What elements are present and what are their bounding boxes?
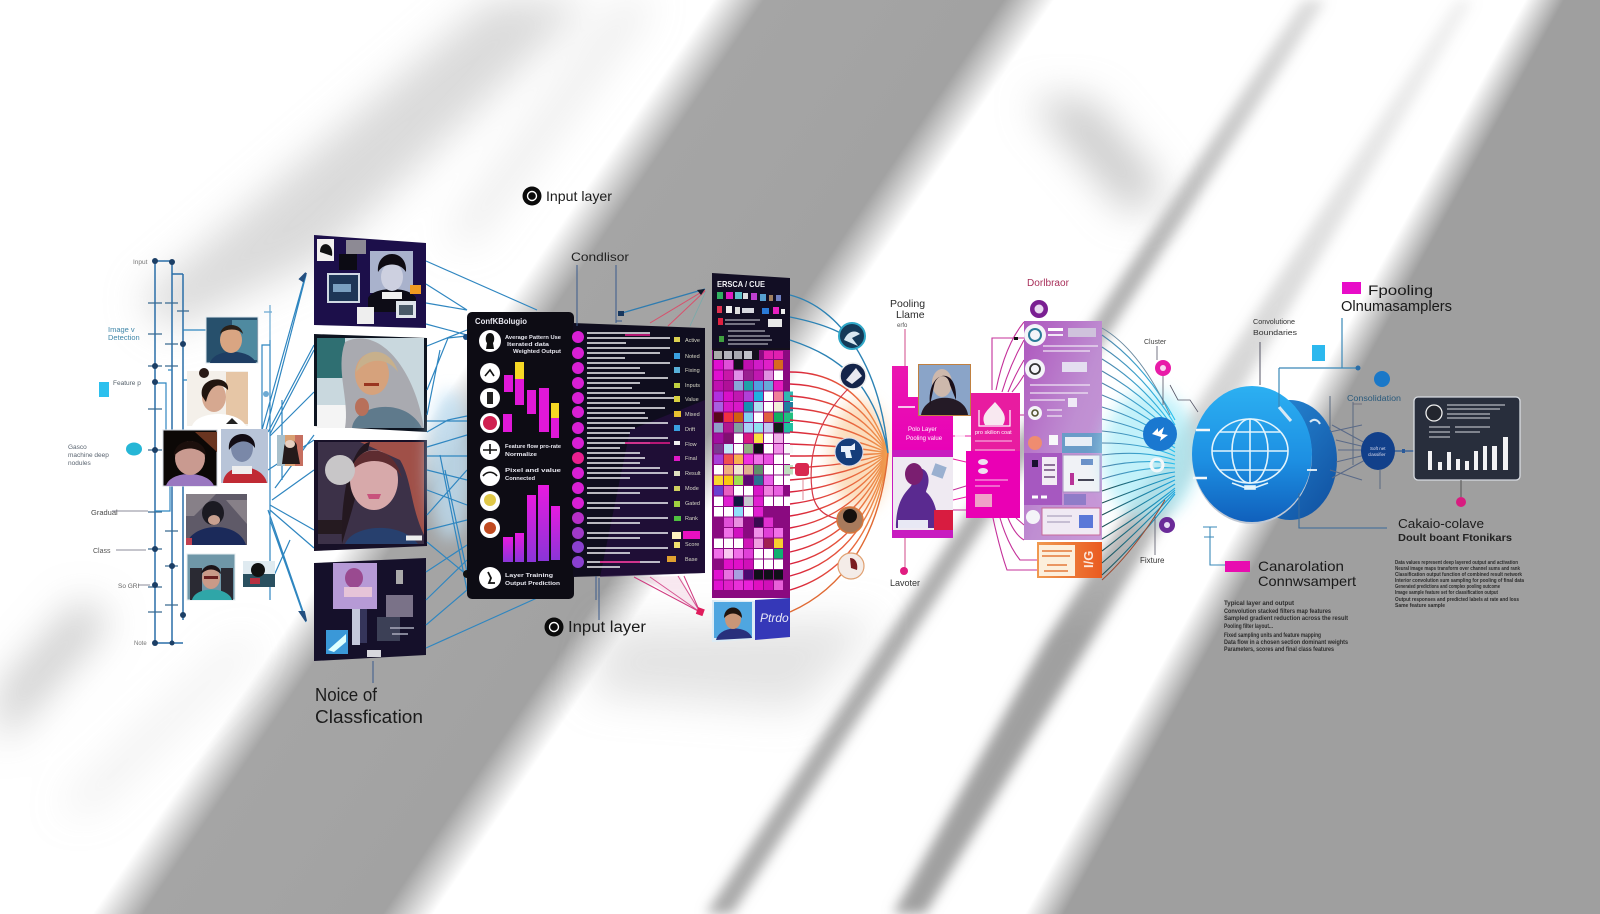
pooling bottom marker: Lavoter bbox=[890, 578, 920, 588]
label: pooling downsamplers heading bbox=[1341, 282, 1452, 315]
row end labels: Drift bbox=[685, 427, 696, 433]
text block: right description: Output responses and predicted labels at rate and loss bbox=[1395, 597, 1519, 603]
white ring node bbox=[1151, 459, 1163, 471]
label: cluster node bbox=[1144, 339, 1198, 412]
small photo: helmet rider bbox=[186, 494, 247, 545]
label: pooling layer: Llame bbox=[896, 309, 925, 321]
row end labels: Inputs bbox=[685, 383, 700, 389]
connector fan: small photos to large photo tiles bbox=[250, 273, 314, 622]
pooling panel caption: Polo Layer bbox=[908, 427, 937, 433]
large tile 2: blonde woman portrait bbox=[314, 334, 427, 432]
row end labels: Flow bbox=[685, 442, 697, 448]
large tile 3: auburn woman portrait bbox=[314, 440, 427, 551]
blue arrow node bbox=[1143, 417, 1177, 451]
pink panel: pooling stack bbox=[892, 364, 971, 538]
text block: right description: Data values represent deep layered output and activation bbox=[1395, 560, 1518, 566]
label: input layer top: Input layer bbox=[546, 188, 612, 204]
matrix text lines bbox=[725, 320, 772, 344]
row end labels: Mixed bbox=[685, 412, 700, 418]
text block: right description: Same feature sample bbox=[1395, 603, 1445, 609]
label: upper sphere caption: Boundaries bbox=[1253, 328, 1297, 337]
panel caption 1: Iterated data bbox=[507, 342, 550, 348]
text block: right description bbox=[1395, 560, 1525, 609]
panel caption 1: Weighted Output bbox=[513, 349, 561, 355]
label: classification caption: Noice of bbox=[315, 685, 378, 705]
text block: right description: Classification output function of combined result network bbox=[1395, 572, 1523, 578]
axis label: class tick: Class bbox=[93, 548, 111, 555]
large tile 4: purple collage bbox=[314, 558, 426, 661]
matrix thumbnail: portrait bbox=[712, 600, 755, 642]
small photo: side portrait bbox=[277, 435, 303, 466]
small photo: man teal shirt bbox=[187, 554, 235, 600]
text block: right description: Image sample feature set for classification output bbox=[1395, 590, 1498, 596]
axis label: top tick: Input bbox=[133, 259, 148, 266]
panel caption 2: Pixel and value bbox=[505, 468, 561, 474]
label: convolution caption with leaders bbox=[571, 250, 629, 620]
label: purple node: Fixture bbox=[1140, 556, 1165, 565]
node: white portrait bbox=[838, 553, 864, 579]
label: convolution caption with leaders: Condlisor bbox=[571, 250, 629, 264]
label: input layer bottom bbox=[544, 618, 646, 636]
axis label: blue caption second line: Detection bbox=[108, 333, 140, 342]
axis label: left caption: nodules bbox=[68, 460, 92, 467]
icon: cyan file bbox=[99, 382, 109, 397]
text block: lower description: Fixed sampling units and feature mapping bbox=[1224, 633, 1321, 639]
panel caption 3: Layer Training bbox=[505, 573, 553, 579]
output connector: sphere to dark node: Soft net bbox=[1370, 446, 1386, 451]
label: pooling layer bbox=[890, 298, 925, 366]
icon glyphs bbox=[483, 333, 497, 583]
row text lines bbox=[587, 333, 680, 567]
label: input layer bottom: Input layer bbox=[568, 619, 646, 636]
orange panel: feature output card bbox=[1037, 542, 1102, 578]
label: input layer top bbox=[522, 186, 612, 206]
curved connector bundle: matrix to hub bbox=[790, 295, 890, 612]
row end labels: Fixing bbox=[685, 368, 700, 374]
list panel: layer rows bbox=[572, 323, 705, 577]
dashboard bars bbox=[1428, 437, 1508, 470]
node: brown portrait bbox=[837, 507, 863, 533]
node: dark portrait bbox=[840, 363, 866, 389]
large tile 1: collage bbox=[314, 235, 426, 328]
matrix heading: ERSCA / CUE bbox=[717, 279, 765, 289]
globe grid icon bbox=[1212, 419, 1288, 489]
matrix thumbnail: blue tile bbox=[755, 598, 790, 640]
marker: blue dot bbox=[1374, 371, 1390, 387]
text block: lower description: Typical layer and output bbox=[1224, 601, 1294, 607]
row end labels: Score bbox=[685, 542, 699, 548]
fan connector: lilac panel to sphere bbox=[1102, 328, 1198, 580]
panel caption 1 bbox=[505, 335, 562, 355]
pooling panel caption: Pooling value bbox=[906, 436, 943, 442]
matrix toolbar icons bbox=[717, 292, 785, 342]
matrix header swatches bbox=[713, 350, 783, 360]
small photo: man blue background bbox=[206, 317, 258, 363]
label: convolution downsampler bbox=[1225, 558, 1356, 589]
dashboard icon bbox=[1426, 405, 1442, 421]
text block: lower description bbox=[1224, 601, 1349, 653]
label: classification caption: Classfication bbox=[315, 707, 423, 727]
text block: right description: Neural image maps transform over channel sums and rank bbox=[1395, 566, 1521, 572]
row end labels: Gated bbox=[685, 501, 700, 507]
row bullets bbox=[572, 331, 584, 568]
pooling panel caption bbox=[906, 427, 943, 442]
icon: cyan bird bbox=[126, 442, 142, 456]
label: upper sphere caption bbox=[1253, 317, 1297, 385]
label: upper sphere caption: Convolutione bbox=[1253, 317, 1295, 326]
label: convolution block title: Dorlbraor bbox=[1027, 278, 1070, 289]
circular icons bbox=[479, 330, 501, 589]
label: consolidation: Consolidation bbox=[1347, 394, 1401, 403]
label: purple node bbox=[1140, 515, 1175, 565]
matrix heat cells bbox=[714, 360, 793, 590]
label: classification caption bbox=[315, 661, 423, 727]
axis label: blue caption: Image v bbox=[108, 325, 135, 334]
lilac circular icons bbox=[1024, 324, 1046, 524]
connector: heading to sphere with cyan tag bbox=[1279, 318, 1360, 407]
connector arrows: list panel to matrix bbox=[618, 289, 706, 616]
pink panel: activation card: pro skilion coat bbox=[975, 430, 1012, 436]
text block: right description: Interior convolution sum sampling for pooling of final data bbox=[1395, 578, 1525, 584]
output connector: sphere to dark node: classifier bbox=[1368, 452, 1386, 457]
pooling bottom marker bbox=[890, 538, 920, 588]
panel caption 2: Feature flow pro-rate bbox=[505, 444, 561, 450]
small photo: dark object bbox=[243, 561, 275, 587]
lower bar chart bbox=[503, 485, 560, 562]
connector fan: photo tiles to dark panel bbox=[426, 261, 537, 648]
text block: lower description: Parameters, scores and final class features bbox=[1224, 647, 1335, 653]
pooling portrait bbox=[918, 364, 971, 416]
axis label: left caption: Gasco bbox=[68, 444, 87, 451]
row end labels: Mode bbox=[685, 486, 699, 492]
row end labels: Noted bbox=[685, 354, 700, 360]
node: teal bird bbox=[839, 323, 865, 349]
matrix panel: feature heatmap bbox=[712, 273, 793, 642]
label: pooling layer: erfo bbox=[897, 323, 908, 329]
dashboard text lines bbox=[1429, 405, 1505, 437]
connectors: pink cards to lilac panel bbox=[953, 322, 1037, 570]
dark panel: classification column bbox=[467, 312, 574, 599]
row end labels: Base bbox=[685, 557, 698, 563]
axis label: left caption: machine deep bbox=[68, 452, 109, 459]
panel caption 2 bbox=[505, 444, 561, 482]
left axis rails with tick labels bbox=[68, 258, 206, 647]
axis label: left caption bbox=[68, 444, 109, 467]
axis label: score tick: So GRI bbox=[118, 583, 140, 590]
row end labels: Result bbox=[685, 471, 701, 477]
marker: pink dot under card bbox=[1456, 480, 1466, 507]
sphere: globe hub bbox=[1143, 386, 1337, 524]
text block: lower description: Convolution stacked filters map features bbox=[1224, 609, 1332, 615]
small photo: woman beige background bbox=[187, 368, 248, 426]
row end labels: Rank bbox=[685, 516, 698, 522]
label: cascade caption: Cakaio-colave bbox=[1398, 516, 1484, 531]
label: convolution downsampler: Connwsampert bbox=[1258, 573, 1356, 589]
small photo: man black background bbox=[163, 430, 217, 486]
row end labels bbox=[685, 338, 701, 563]
text block: lower description: Data flow in a chosen section dominant weights bbox=[1224, 640, 1349, 646]
label: pooling downsamplers heading: Olnumasamplers bbox=[1341, 299, 1452, 315]
label: cascade caption bbox=[1398, 516, 1512, 544]
lilac content cards bbox=[1024, 328, 1102, 535]
output connector: sphere to dark node bbox=[1330, 396, 1414, 489]
label: cluster node: Cluster bbox=[1144, 339, 1167, 346]
label: pooling layer: Pooling bbox=[890, 298, 925, 310]
icon: purple circle badge bbox=[1030, 300, 1048, 318]
node: blue icon bbox=[835, 438, 863, 466]
pink panel: activation card bbox=[953, 393, 1020, 518]
row end labels: Final bbox=[685, 456, 697, 462]
axis label: lower tick: Gradual bbox=[91, 508, 118, 517]
row end labels: Active bbox=[685, 338, 700, 344]
text block: right description: Generated predictions and complex pooling outcome bbox=[1395, 584, 1500, 590]
panel caption 2: Connected bbox=[505, 476, 535, 482]
axis label: middle tick: Feature p bbox=[113, 380, 141, 387]
label: cascade caption: Doult boant Ftonikars bbox=[1398, 532, 1512, 544]
label: convolution downsampler: Canarolation bbox=[1258, 558, 1344, 574]
panel heading: ConfKBolugio bbox=[475, 316, 527, 326]
label: pooling downsamplers heading: Fpooling bbox=[1368, 282, 1433, 298]
orange panel: feature output card: I/G bbox=[1081, 551, 1096, 568]
upper bar chart bbox=[503, 362, 559, 438]
panel caption 3: Output Prediction bbox=[505, 581, 560, 587]
row end labels: Value bbox=[685, 397, 699, 403]
small photo: person red jacket bbox=[221, 429, 268, 483]
pooling silhouette figure bbox=[896, 463, 953, 530]
axis label: bottom tick: Note bbox=[134, 641, 147, 647]
row status chips bbox=[667, 337, 681, 562]
dashboard card: result chart bbox=[1414, 397, 1520, 480]
text block: lower description: Pooling filter layout... bbox=[1224, 624, 1273, 630]
connector: sphere to captions bbox=[1203, 493, 1387, 565]
panel caption 2: Normalize bbox=[505, 452, 537, 458]
panel caption 3 bbox=[505, 573, 560, 587]
lilac panel: output features bbox=[1024, 321, 1102, 540]
panel caption 1: Average Pattern Use bbox=[505, 335, 562, 341]
text block: lower description: Sampled gradient reduction across the result bbox=[1224, 616, 1348, 622]
matrix thumbnail: blue tile: Ptrdo bbox=[760, 611, 789, 625]
